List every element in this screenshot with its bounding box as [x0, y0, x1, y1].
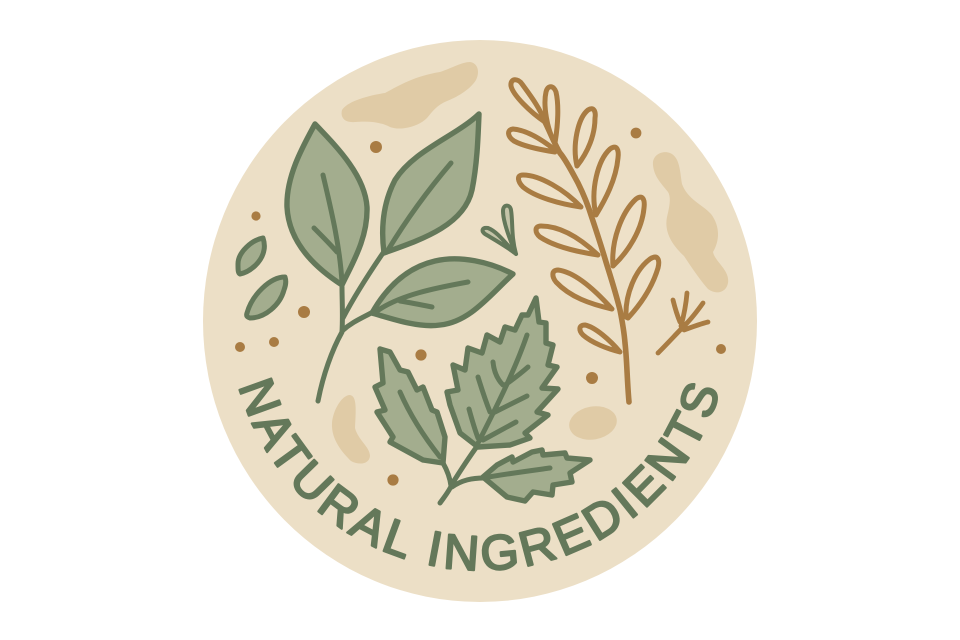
- sprig leaves: [511, 80, 545, 122]
- herb stem: [440, 445, 484, 503]
- upper right leaf: [383, 114, 479, 253]
- decorative brown dots: [235, 128, 726, 486]
- right serrated leaf: [483, 450, 590, 501]
- icon: small brown twig: [658, 293, 708, 353]
- leaf veins: [314, 163, 468, 311]
- icon: brown rosemary sprig: [509, 80, 659, 402]
- left serrated leaf: [375, 349, 445, 463]
- serrated leaf veins: [400, 335, 550, 478]
- upper left leaf: [287, 124, 367, 285]
- title: Natural Ingredients curved text: NATURAL INGREDIENTS: [238, 377, 718, 572]
- icon: small green leaves left: [238, 238, 286, 318]
- branch stem: [318, 253, 383, 401]
- badge background circle: [203, 40, 757, 602]
- right leaf: [372, 259, 513, 326]
- sprig stem: [545, 122, 629, 402]
- large serrated leaf: [447, 298, 558, 447]
- decorative tan blobs: [332, 62, 728, 464]
- icon: green three-leaf branch: [287, 114, 513, 401]
- icon: small green sprig: [483, 206, 516, 254]
- icon: serrated green herb: [375, 298, 590, 503]
